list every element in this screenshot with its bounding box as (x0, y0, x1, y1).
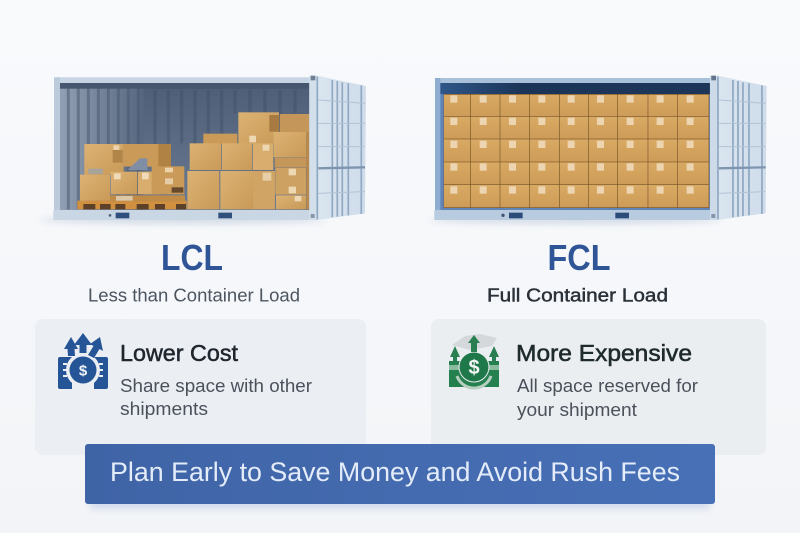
card text (517, 376, 698, 420)
card title: Lower Cost: Lower Cost (120, 340, 239, 366)
FCL container illustration (428, 76, 767, 223)
heading: FCL: FCL (548, 237, 610, 278)
subheading: Less than Container Load: Less than Container Load (88, 286, 300, 306)
subheading: Full Container Load: Full Container Load (487, 286, 668, 306)
card text: Share space with other (120, 376, 312, 396)
right boxes (203, 134, 237, 144)
heading: LCL: LCL (161, 237, 223, 278)
icon: money with up arrows (58, 333, 108, 390)
door (309, 76, 366, 220)
banner text: Plan Early to Save Money and Avoid Rush Fees (110, 457, 680, 487)
card text: your shipment (517, 400, 637, 420)
door (710, 76, 767, 220)
panel: LCL lower cost (35, 319, 366, 455)
card title: More Expensive: More Expensive (516, 340, 692, 366)
card text: All space reserved for (517, 376, 698, 396)
icon: money with green arrows (449, 334, 499, 388)
box labels (450, 95, 694, 194)
icon: money with green arrows: $ (468, 357, 480, 379)
frame (54, 77, 317, 83)
LCL container illustration (40, 76, 366, 223)
card text (120, 376, 312, 419)
cargo boxes (444, 95, 709, 207)
card text: shipments (120, 399, 208, 419)
panel: FCL more expensive (431, 319, 766, 455)
pallet (77, 201, 187, 209)
icon: money with up arrows: $ (79, 362, 88, 380)
banner (85, 444, 715, 508)
frame (435, 78, 714, 83)
left boxes (84, 144, 124, 175)
